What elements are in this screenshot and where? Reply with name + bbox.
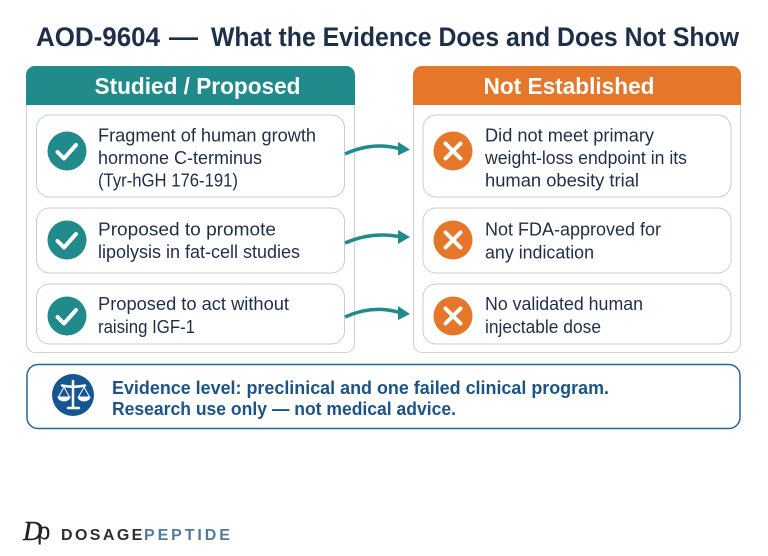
- card: lipolysis: [36, 208, 344, 273]
- card: IGF-1: raising IGF-1: [98, 317, 195, 337]
- panel header: not established: [413, 66, 741, 105]
- arrow: row 1: [345, 142, 410, 156]
- panel: not established: [413, 66, 741, 352]
- panel header: studied / proposed: [26, 66, 355, 105]
- callout: evidence level: Research use only — not medical advice.: [112, 399, 456, 419]
- logo: DosagePeptide: D: [22, 516, 43, 546]
- logo: DosagePeptide: DOSAGE: [61, 527, 145, 544]
- logo: DosagePeptide: p: [37, 518, 50, 546]
- card: primary endpoint: weight-loss endpoint in its: [484, 148, 687, 168]
- panel header: studied / proposed: Studied / Proposed: [94, 73, 300, 99]
- card: no validated dose: injectable dose: [485, 317, 601, 337]
- card: IGF-1: [36, 284, 344, 344]
- card: fragment of hGH: hormone C-terminus: [98, 148, 262, 168]
- callout: evidence level: Evidence level: preclinical and one failed clinical program.: [112, 378, 609, 398]
- card: not FDA-approved: Not FDA-approved for: [485, 220, 661, 240]
- callout: evidence level: [27, 364, 740, 428]
- card: fragment of hGH: Fragment of human growth: [98, 126, 316, 146]
- card: no validated dose: [423, 284, 731, 344]
- arrow: row 3: [345, 306, 410, 320]
- arrow: row 2: [345, 230, 410, 244]
- card: no validated dose: No validated human: [485, 294, 643, 314]
- panel header: not established: Not Established: [484, 73, 654, 99]
- card: lipolysis: lipolysis in fat-cell studies: [98, 242, 300, 262]
- panel: studied / proposed: [26, 66, 355, 352]
- card: primary endpoint: human obesity trial: [485, 170, 639, 190]
- icon: scales of justice: [52, 374, 94, 416]
- card: not FDA-approved: any indication: [485, 242, 594, 262]
- card: primary endpoint: [423, 115, 731, 197]
- title: —: [169, 22, 198, 52]
- logo: DosagePeptide: PEPTIDE: [144, 527, 233, 544]
- card: fragment of hGH: [36, 115, 344, 197]
- card: IGF-1: Proposed to act without: [98, 294, 289, 314]
- card: primary endpoint: Did not meet primary: [485, 126, 654, 146]
- title: AOD-9604: [36, 22, 160, 52]
- card: fragment of hGH: (Tyr-hGH 176-191): [98, 170, 238, 190]
- card: lipolysis: Proposed to promote: [98, 220, 276, 240]
- logo: DosagePeptide: [22, 516, 233, 546]
- card: not FDA-approved: [423, 208, 731, 273]
